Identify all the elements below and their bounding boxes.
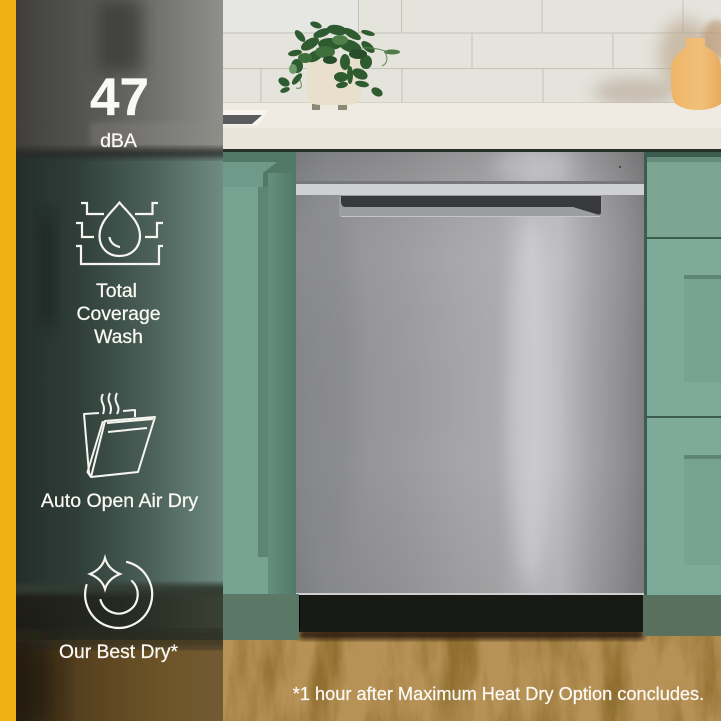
label: Total: [96, 280, 137, 302]
wood floor: [223, 630, 721, 721]
icon: water drop in tub: [76, 202, 163, 264]
kitchen scene background: [223, 0, 721, 721]
yellow accent bar: [0, 0, 16, 721]
label: [76, 280, 161, 348]
toe kick: [300, 595, 643, 632]
frosted side panel: [16, 0, 223, 721]
tile wall: [223, 0, 721, 106]
stat: 47 dBA: dBA: [100, 130, 137, 152]
stat: 47 dBA: 47: [90, 68, 149, 127]
potted plant: [277, 20, 400, 110]
label: Coverage: [76, 303, 161, 325]
cabinet bases: [223, 594, 721, 640]
right cabinets: [643, 152, 721, 636]
dishwasher: [296, 149, 644, 595]
label: Auto Open Air Dry: [41, 490, 198, 512]
feature: Auto Open Air Dry: [41, 393, 198, 512]
icon: sparkle and dish: [85, 558, 152, 628]
icon: open dishwasher with steam: [84, 393, 155, 477]
countertop: [223, 103, 721, 152]
feature: Our Best Dry: [59, 558, 178, 663]
left cabinet: [223, 152, 299, 640]
label: Our Best Dry*: [59, 642, 178, 663]
footnote: *1 hour after Maximum Heat Dry Option concludes.: [293, 684, 704, 704]
feature: Total Coverage Wash: [76, 202, 163, 348]
vase: [671, 38, 721, 110]
label: Wash: [94, 326, 143, 348]
